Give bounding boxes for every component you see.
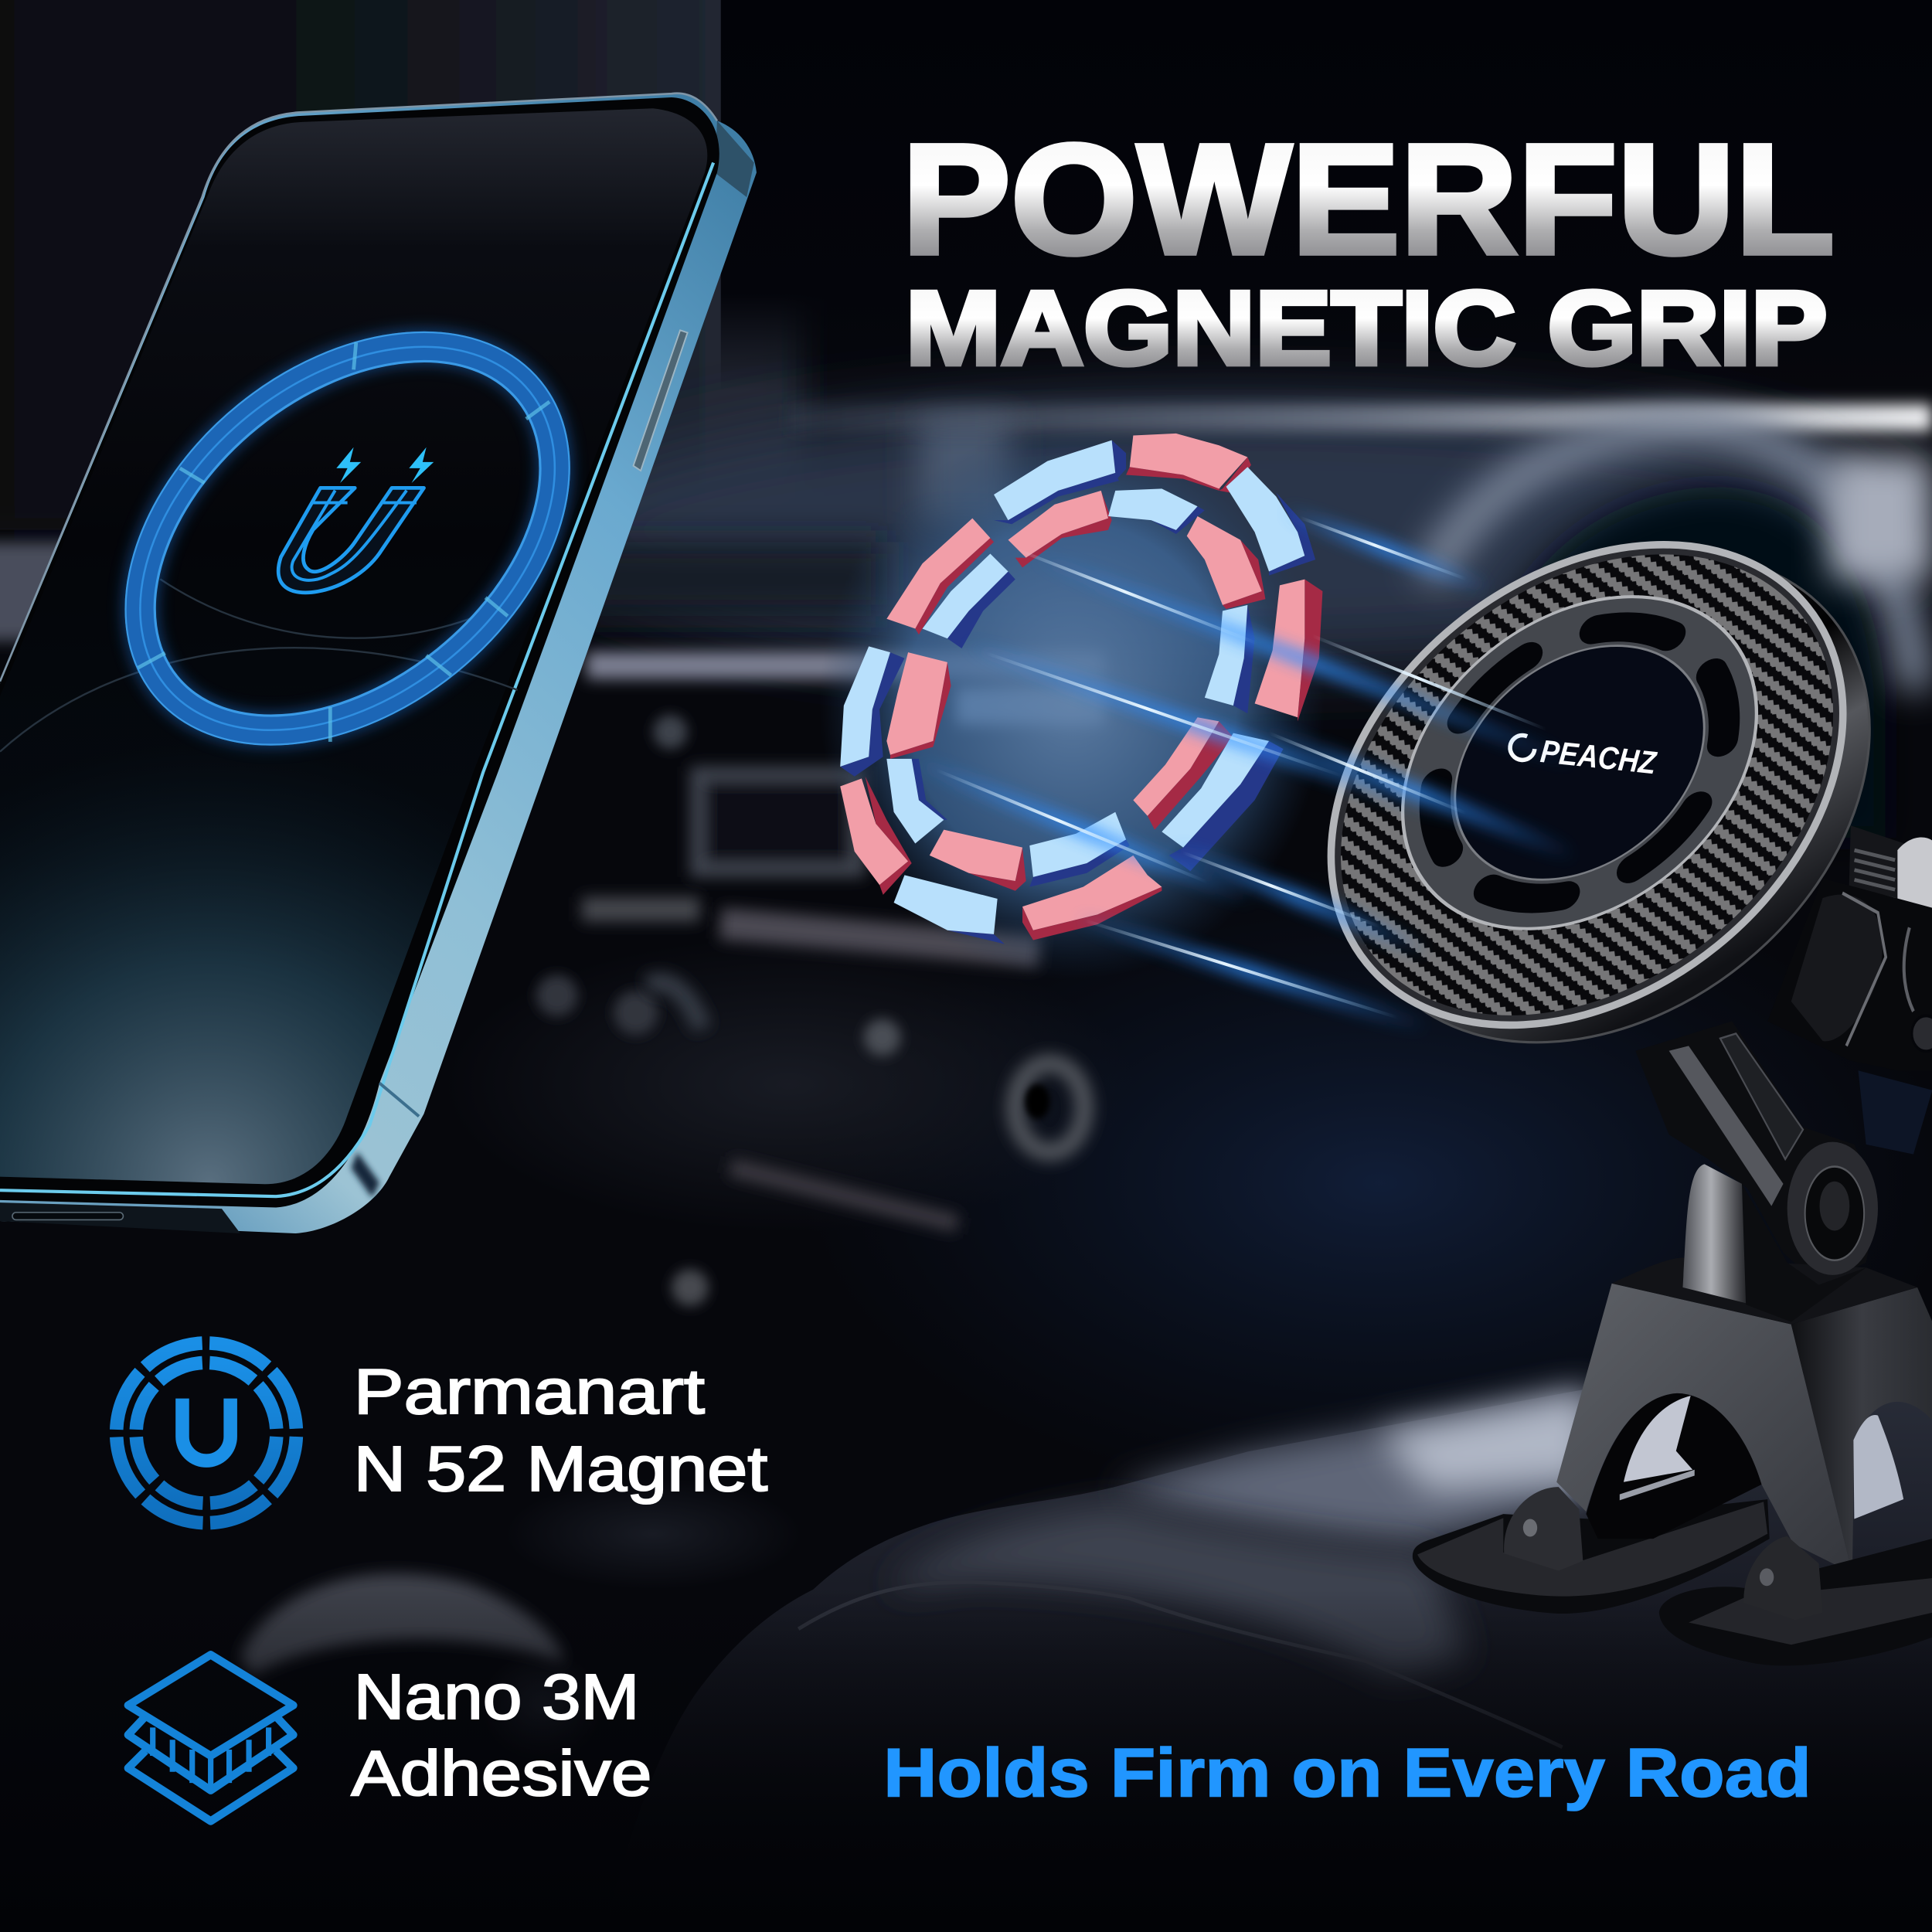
dark panel behind title — [721, 0, 1932, 392]
magnetic mount disc — [1236, 446, 1932, 1143]
blue magnetic ring — [46, 248, 649, 829]
arch openings — [1586, 1393, 1761, 1539]
lit upper bolster — [1115, 1389, 1590, 1540]
carbon fibre ring — [1250, 460, 1923, 1111]
bottom port — [12, 1213, 123, 1219]
feature: 3M adhesive — [128, 1655, 658, 1821]
tagline: Holds Firm on Every Road — [883, 1734, 1811, 1811]
exploded magnet ring — [840, 434, 1322, 944]
metal inner ring with slots — [1338, 529, 1821, 997]
magnetic energy beams — [912, 510, 1577, 1028]
pivot knob — [1787, 1142, 1878, 1275]
stitch line — [798, 1582, 1563, 1747]
disc back edge — [1255, 454, 1932, 1143]
screen bottom glow — [0, 616, 530, 1184]
hinge right — [1743, 1536, 1823, 1620]
phone black bezel — [0, 97, 719, 1207]
arm — [1635, 1021, 1878, 1285]
text: magnet label: N 52 Magnet — [354, 1433, 767, 1505]
PEACHZ logo: PEACHZ — [1539, 733, 1659, 781]
rear joint — [1767, 878, 1932, 1155]
disc silver rim — [1236, 446, 1932, 1124]
icon: segmented magnet ring — [117, 1343, 296, 1523]
foot plate left — [1413, 1499, 1770, 1614]
collar and base top — [1612, 1258, 1917, 1325]
base pyramid left face — [1556, 1284, 1852, 1573]
base pyramid right face — [1791, 1287, 1932, 1573]
text: adhesive label: Adhesive — [351, 1737, 651, 1809]
phone top-right chamfer — [715, 121, 754, 197]
leather seat — [604, 1368, 1932, 1932]
car mount stand — [1413, 878, 1932, 1665]
phone screen — [0, 108, 707, 1184]
corrugated grip bracket — [1849, 825, 1932, 918]
bottom vignette — [0, 1590, 1932, 1932]
title line 2: MAGNETIC GRIP — [906, 269, 1827, 386]
text: magnet label: Parmanart — [354, 1355, 705, 1427]
text: adhesive label: Nano 3M — [354, 1661, 639, 1733]
bottom edge shading — [0, 1202, 240, 1233]
bright leather highlight — [1380, 1393, 1590, 1491]
phone metal body — [0, 94, 757, 1233]
hinge left — [1504, 1487, 1583, 1571]
phone left edge highlight — [0, 94, 717, 682]
foot plate right — [1659, 1539, 1932, 1665]
faint screen arcs — [0, 579, 518, 752]
PEACHZ logo — [1509, 730, 1659, 781]
phone corner shadow — [351, 1152, 379, 1198]
title — [902, 112, 1835, 386]
blue glow inside magnet ring — [819, 425, 1325, 980]
antenna band — [379, 1083, 419, 1117]
title line 1: POWERFUL — [902, 112, 1835, 287]
phone with MagSafe ring — [0, 94, 757, 1233]
side button — [634, 330, 688, 471]
pivot post — [1682, 1164, 1746, 1303]
mid bolster — [887, 1505, 1466, 1675]
ring segment ticks — [138, 342, 549, 742]
phone cyan inner line — [0, 162, 713, 1196]
feature: N52 magnet — [117, 1343, 767, 1523]
magnet icon on screen — [278, 447, 434, 593]
icon: adhesive layers — [128, 1655, 293, 1821]
